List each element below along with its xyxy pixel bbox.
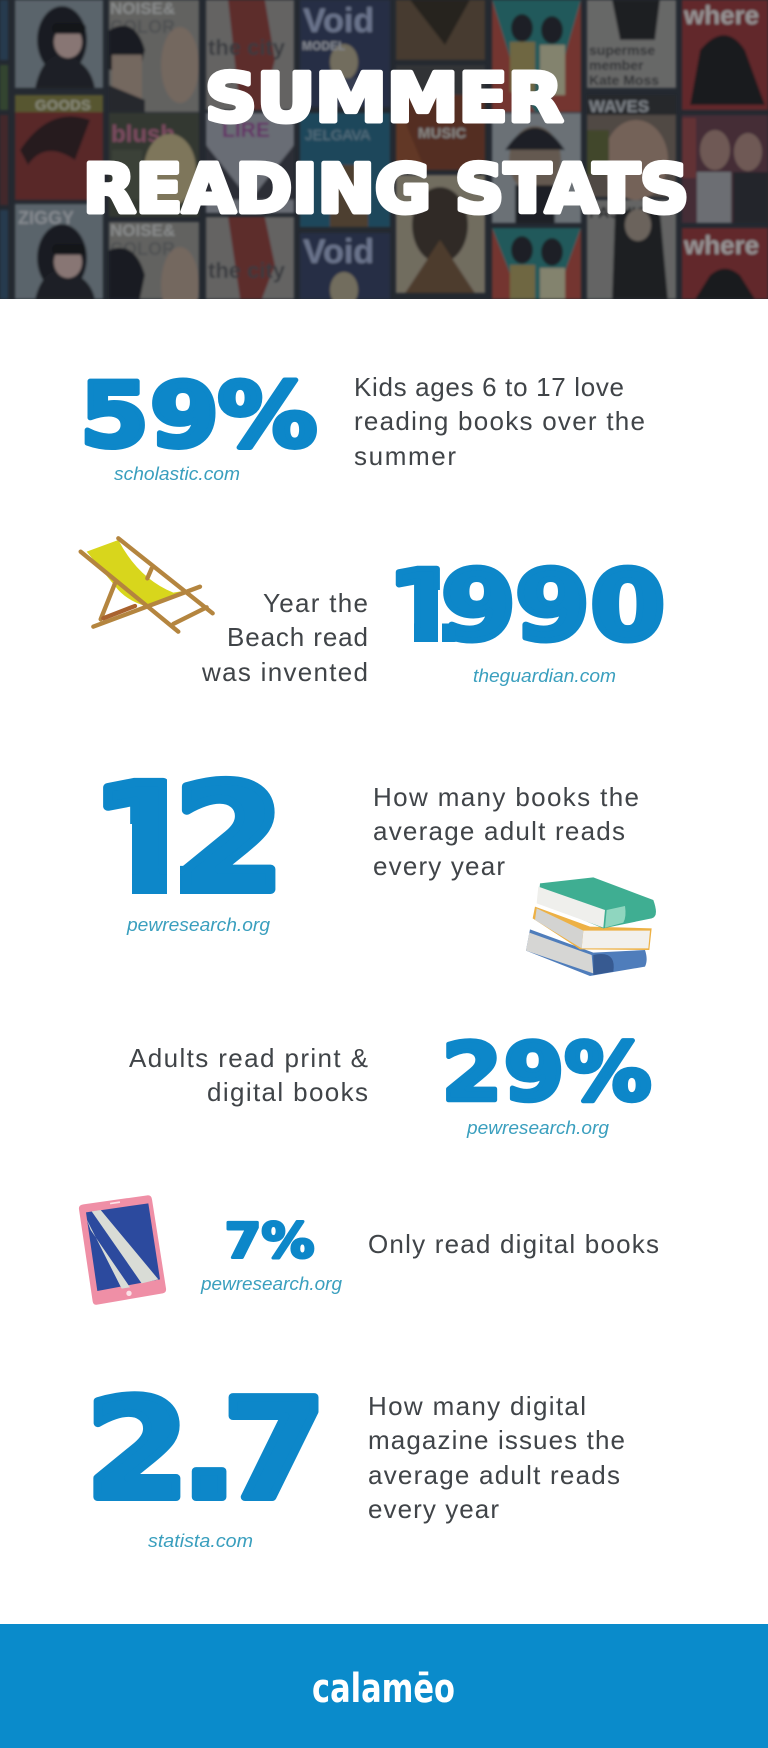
stat: 7% digital only: Only read digital books	[368, 1229, 659, 1259]
stat: 2.7 magazines: magazine issues the	[368, 1425, 625, 1455]
header: magazine cover collage: blush	[111, 121, 175, 148]
stat: 1990 beach read: Year the	[263, 588, 368, 618]
header: magazine cover collage: Kate Moss	[589, 72, 659, 88]
stat: 29% print and digital: pewresearch.org	[466, 1118, 609, 1138]
stat: 12 books: 12	[90, 754, 284, 925]
icon: tablet	[79, 1195, 166, 1305]
stat: 2.7 magazines: 2.7	[86, 1370, 326, 1530]
header: magazine cover collage: member	[589, 57, 644, 73]
stat: 1990 beach read: theguardian.com	[473, 666, 616, 686]
col 8	[682, 0, 768, 110]
title	[83, 59, 689, 228]
header: magazine cover collage: Void	[303, 2, 374, 40]
stat: 2.7 magazines: statista.com	[148, 1531, 253, 1551]
icon: beach chair	[81, 538, 213, 632]
stat: 7% digital only	[200, 1213, 659, 1294]
stat: 29% print and digital: 29%	[442, 1025, 652, 1119]
stat: 12 books: How many books the	[373, 782, 639, 812]
header: magazine cover collage: supermse	[589, 42, 655, 58]
stat: 59% kids: Kids ages 6 to 17 love	[354, 372, 624, 402]
stat: 7% digital only: pewresearch.org	[200, 1274, 342, 1294]
stat: 1990 beach read	[201, 550, 665, 687]
col 4	[300, 0, 390, 107]
header: magazine cover collage	[0, 0, 768, 323]
col 1	[15, 0, 103, 88]
title: SUMMER	[205, 59, 563, 137]
header: magazine cover collage: Void	[303, 233, 374, 271]
stat: 2.7 magazines: How many digital	[368, 1391, 586, 1421]
header: magazine cover collage: where	[683, 230, 759, 260]
stat: 1990 beach read: 1990	[387, 550, 665, 663]
header: magazine cover collage: the city	[208, 258, 286, 283]
header: magazine cover collage: MUSIC	[418, 125, 466, 142]
stat: 59% kids: summer	[354, 441, 456, 471]
footer band with logo: calamēo	[312, 1666, 455, 1712]
header: magazine cover collage: COLOR	[110, 17, 175, 37]
stat: 59% kids: 59%	[80, 364, 317, 468]
icon: stack of books	[526, 877, 656, 976]
stat: 59% kids	[80, 364, 645, 484]
header: magazine cover collage: ZIGGY	[18, 208, 74, 228]
stat: 2.7 magazines	[86, 1370, 625, 1551]
stat: 59% kids: reading books over the	[354, 406, 645, 436]
stat: 12 books: average adult reads	[373, 816, 625, 846]
header: magazine cover collage: MODEL	[302, 39, 345, 53]
header: magazine cover collage: GOODS	[35, 97, 91, 114]
header: magazine cover collage: the city	[208, 35, 286, 60]
header: magazine cover collage: WAVES	[589, 97, 649, 116]
stat: 59% kids: scholastic.com	[114, 464, 240, 484]
stat: 7% digital only: 7%	[225, 1213, 314, 1269]
col 2	[109, 0, 199, 112]
stat: 29% print and digital: digital books	[207, 1077, 368, 1107]
col 5	[396, 0, 485, 60]
stat: 1990 beach read: Beach read	[227, 622, 368, 652]
header: magazine cover collage: LIRE	[222, 119, 270, 142]
stat: 29% print and digital: Adults read print &	[129, 1043, 368, 1073]
stat: 2.7 magazines: average adult reads	[368, 1460, 620, 1490]
header: magazine cover collage: where	[683, 0, 759, 30]
stat: 12 books	[85, 754, 639, 935]
stat: 12 books: pewresearch.org	[126, 915, 270, 935]
header: magazine cover collage: NOISE&	[110, 221, 175, 240]
footer band with logo	[0, 1624, 768, 1748]
col 7	[587, 0, 676, 88]
header: magazine cover collage: COLOR	[110, 239, 175, 259]
stat: 1990 beach read: was invented	[201, 657, 368, 687]
header: magazine cover collage: FASHION	[589, 205, 660, 222]
col 6	[492, 0, 581, 112]
stat: 29% print and digital	[129, 1025, 652, 1138]
stat: 2.7 magazines: every year	[368, 1494, 499, 1524]
stat: 12 books: every year	[373, 851, 505, 881]
header: magazine cover collage: JELGAVA	[305, 127, 370, 144]
col 3	[206, 0, 294, 110]
title: READING STATS	[83, 150, 689, 228]
